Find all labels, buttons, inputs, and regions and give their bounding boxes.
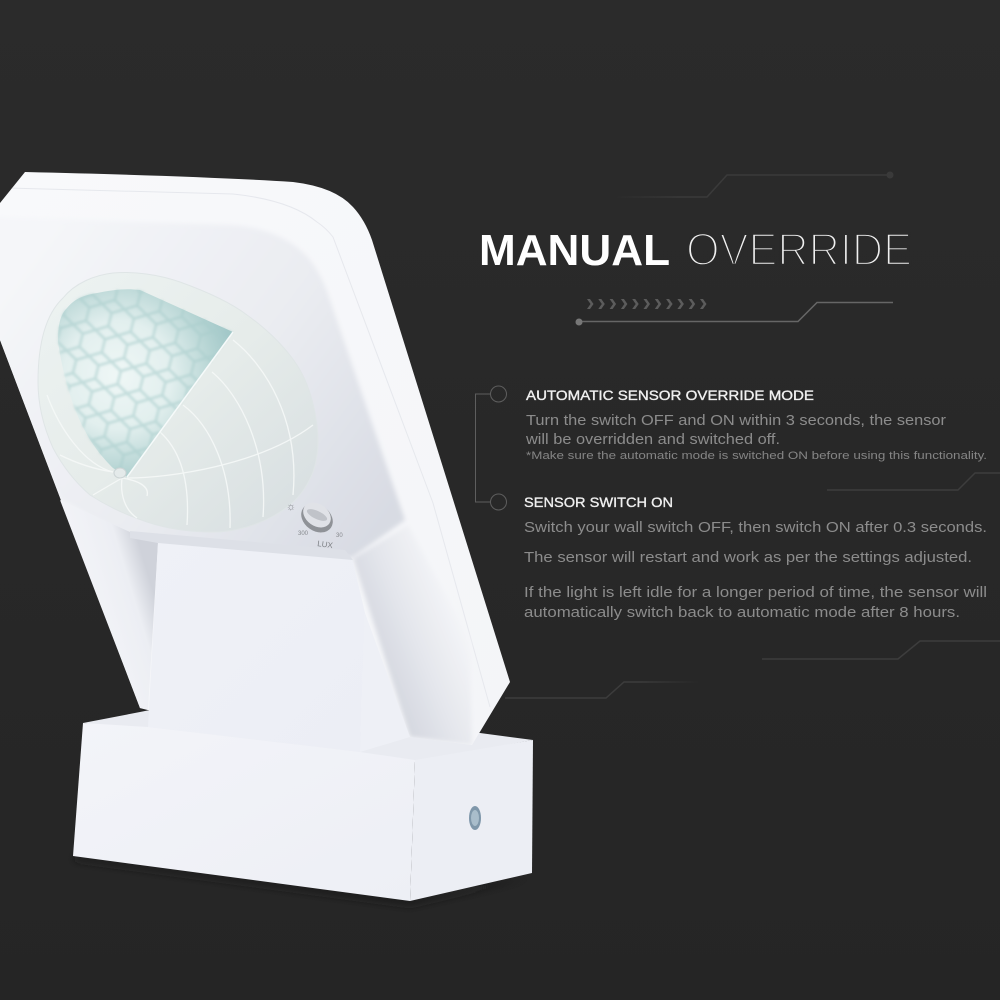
section: sensor switch on [524,494,987,621]
title underline circuit [576,302,893,326]
shadow below base [75,856,530,905]
section: automatic sensor override mode: *Make sure the automatic mode is switched ON before using this functionality. [526,450,987,462]
base front [73,723,415,901]
section: sensor switch on: The sensor will restart and work as per the settings adjusted. [524,549,972,566]
decorative circuit line: right lower [762,641,1000,659]
decorative circuit line: top [613,172,894,197]
base side [410,740,533,901]
stem side [360,613,410,752]
dome window with hex lens [58,289,233,477]
section: sensor switch on: Switch your wall switch OFF, then switch ON after 0.3 seconds. [524,519,987,536]
lux dial: ☼ [286,501,296,513]
window diagonal highlight [127,332,233,477]
dome ribs [47,340,313,528]
lux dial [286,497,343,550]
screw [469,806,481,830]
section: automatic sensor override mode: will be overridden and switched off. [525,431,780,448]
product: PIR sensor light [0,172,533,905]
panel front face [0,217,405,558]
section: automatic sensor override mode [525,387,987,462]
panel shading [0,188,490,745]
section: sensor switch on: If the light is left idle for a longer period of time, the sensor will [524,584,987,601]
stem front [148,543,365,752]
dome tip [114,468,126,478]
panel lower right band [353,525,472,745]
decorative circuit line: right upper [827,473,1000,490]
title [479,224,912,275]
chevrons [587,299,706,309]
section: sensor switch on: automatically switch back to automatic mode after 8 hours. [524,604,960,621]
dome lens [38,272,318,532]
connector bracket with circles [476,386,506,510]
lux dial: 30 [336,533,343,539]
panel body [0,172,510,745]
dome outer [38,272,318,532]
section: automatic sensor override mode: Turn the switch OFF and ON within 3 seconds, the sensor [526,412,946,429]
panel lower left strip [60,500,158,710]
title: MANUAL [479,226,670,275]
lux dial: 300 [298,531,309,537]
lux dial: LUX [317,539,334,550]
section: sensor switch on: SENSOR SWITCH ON [524,494,673,510]
section: automatic sensor override mode: AUTOMATIC SENSOR OVERRIDE MODE [526,387,814,403]
title: OVERRIDE [686,224,912,275]
decorative circuit line: bottom [505,682,700,698]
panel lip over stem [130,531,353,560]
panel top seam [7,188,490,707]
base back top [83,710,533,762]
